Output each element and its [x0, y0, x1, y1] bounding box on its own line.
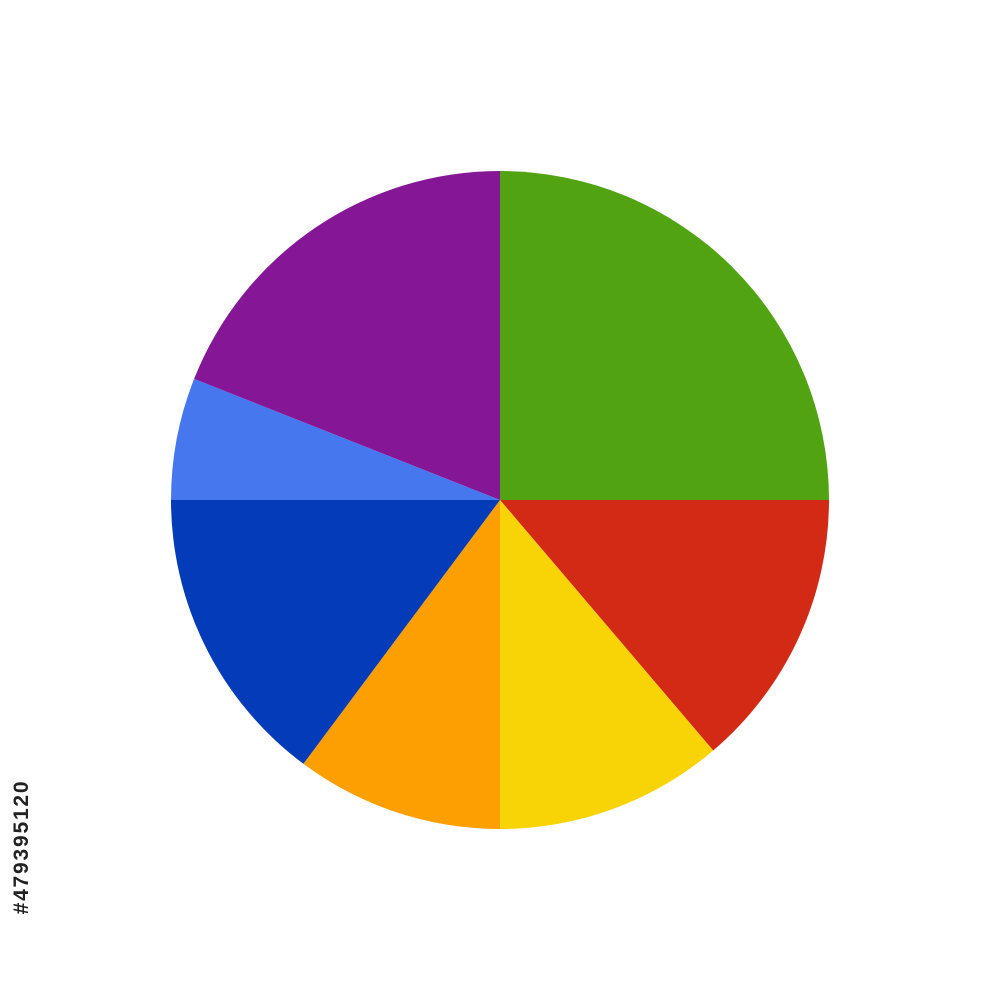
slice: purple — [194, 171, 500, 500]
slice: light blue — [171, 379, 500, 500]
stock id text: #479395120 — [10, 780, 33, 914]
slice: green — [500, 171, 829, 500]
slice: yellow — [500, 500, 713, 829]
slice: dark blue — [171, 500, 500, 764]
slice: orange — [303, 500, 500, 829]
slice: red — [500, 500, 829, 750]
